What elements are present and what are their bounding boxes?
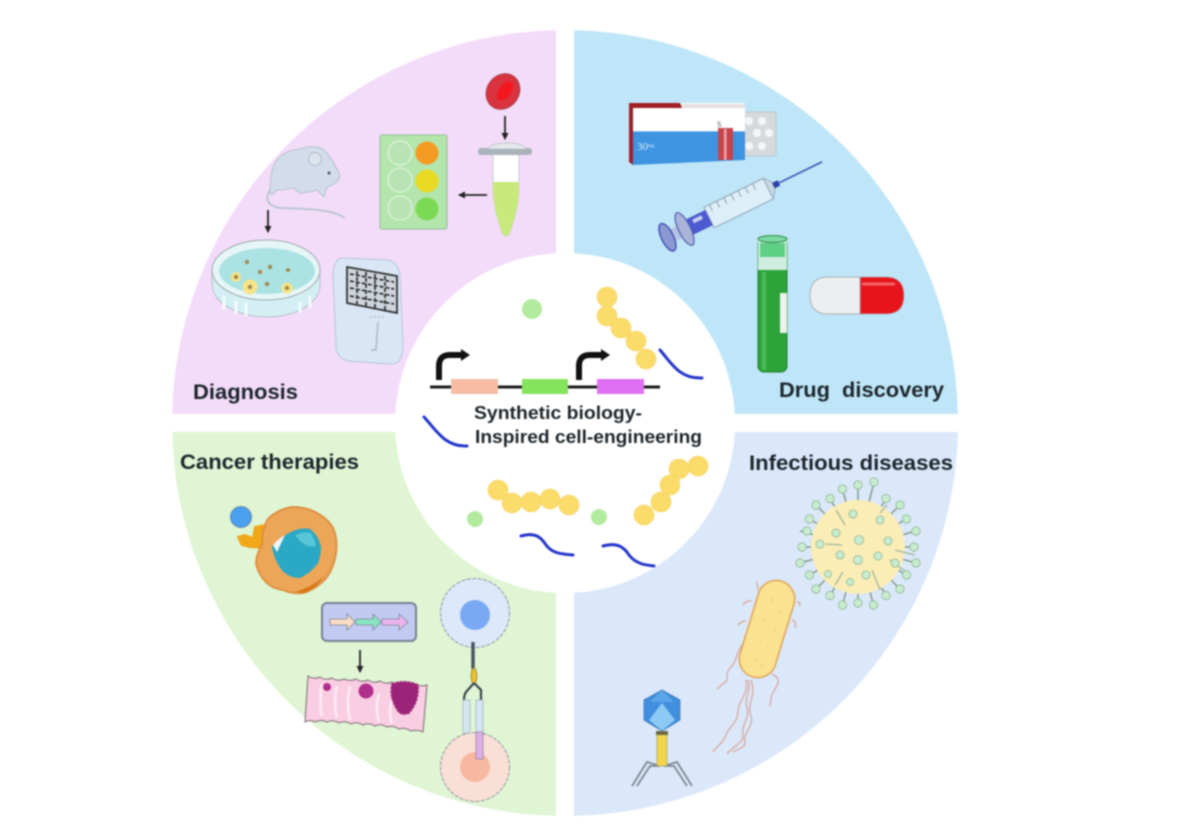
heading: cancer therapies: Cancer therapies <box>180 451 359 474</box>
icon: bacteriophage <box>632 690 692 786</box>
title: synthetic biology-inspired cell-engineering: Inspired cell-engineering <box>475 427 702 447</box>
icon: medicine box: S <box>717 120 721 129</box>
icon: diagnostic device <box>333 258 403 364</box>
icon: capsule <box>810 277 904 314</box>
heading: infectious diseases: Infectious diseases <box>749 452 953 475</box>
panel: infectious diseases <box>574 432 958 816</box>
arrow: cell to tube <box>504 116 506 139</box>
icon: medicine box: mg <box>648 144 655 149</box>
panel: drug discovery <box>574 30 958 414</box>
title: synthetic biology-inspired cell-engineering <box>474 403 702 447</box>
arrow: mouse to dish <box>267 210 269 232</box>
icon: gene circuit box <box>322 603 416 641</box>
yellow peptide chains <box>488 287 708 525</box>
icon: green test tube <box>758 236 787 372</box>
heading: diagnosis: Diagnosis <box>193 381 298 404</box>
blue RNA strands <box>424 350 702 566</box>
icon: bacterium <box>713 576 800 754</box>
panel: cancer therapies <box>172 432 556 816</box>
icon: medicine box: 30 <box>637 141 648 153</box>
icon: target cell <box>440 732 510 802</box>
icon: well plate <box>380 135 447 229</box>
icon: effector cell <box>440 578 510 648</box>
panel: diagnosis <box>172 30 556 414</box>
centre: synthetic biology core <box>424 287 708 566</box>
green molecules <box>467 299 607 527</box>
icon: tissue with tumours <box>305 676 427 732</box>
icon: syringe <box>654 146 830 256</box>
heading: drug discovery: Drug discovery <box>779 379 944 402</box>
icon: antibody-bound cancer cell <box>230 506 337 593</box>
genetic circuit <box>430 349 660 394</box>
icon: medicine box <box>629 103 745 165</box>
icon: cell-cell receptor linker <box>463 642 483 759</box>
title: synthetic biology-inspired cell-engineering: Synthetic biology- <box>474 403 642 423</box>
icon: red blood cell <box>479 67 527 116</box>
icon: petri dish <box>212 240 320 317</box>
icon: virus <box>796 478 920 609</box>
icon: blister pack <box>744 112 776 156</box>
arrow: circuit to tissue <box>359 650 361 672</box>
arrow: tube to plate <box>459 194 487 196</box>
icon: mouse <box>267 147 345 218</box>
icon: microcentrifuge tube <box>478 143 532 236</box>
